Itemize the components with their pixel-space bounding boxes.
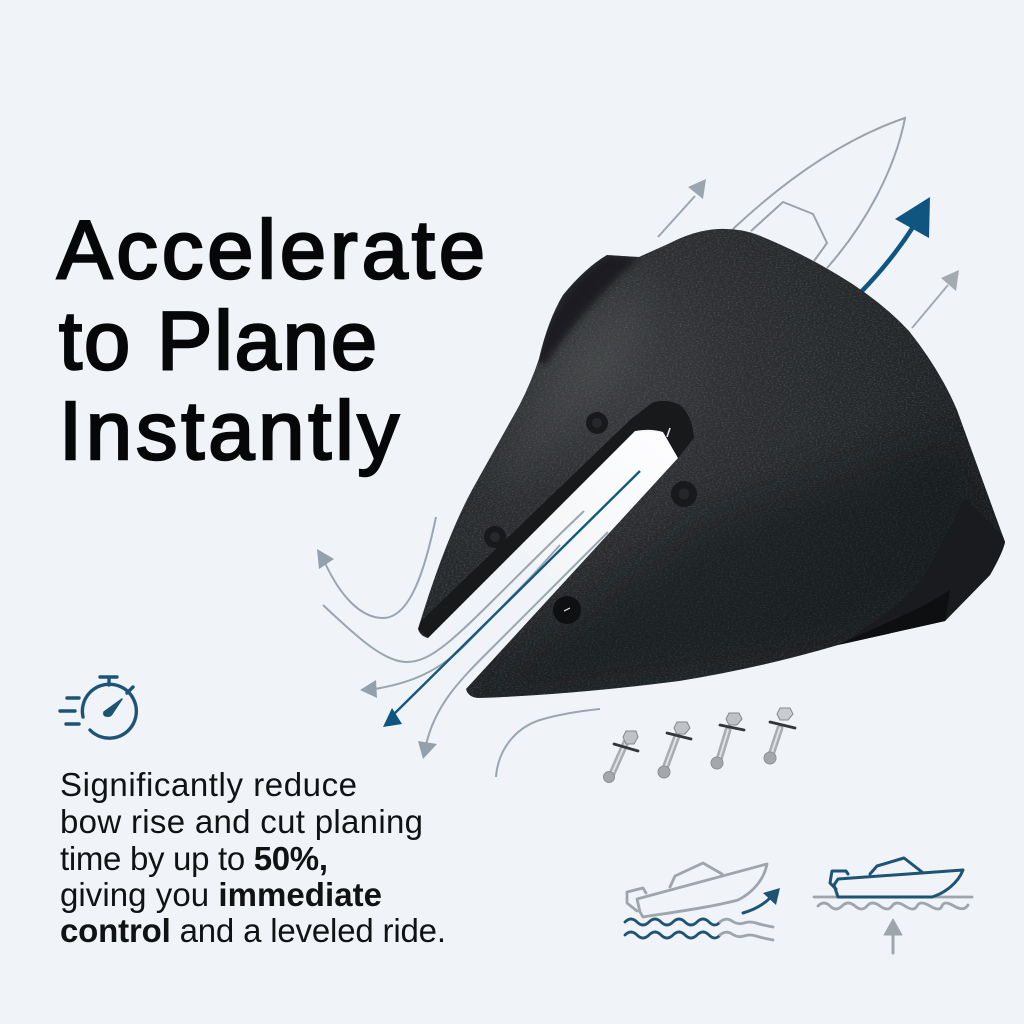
slot opening: [520, 431, 678, 588]
icon: boat with bow rise: [625, 863, 780, 940]
title: Accelerate: [57, 203, 485, 296]
lower shading: [470, 430, 1010, 700]
arrow: upper right lift: [912, 270, 959, 328]
mounting hole 4: [553, 596, 581, 624]
boat outline behind plate: [733, 118, 905, 268]
arrow: upper left lift: [658, 179, 706, 237]
body text: Significantly reduce: [60, 766, 357, 803]
left fin dark strip: [535, 255, 639, 365]
body text: giving you immediate: [60, 876, 382, 913]
bolt 2: [658, 722, 691, 778]
notch: [667, 428, 670, 437]
body text: bow rise and cut planing: [60, 803, 423, 840]
title: Instantly: [59, 384, 400, 477]
hardware: mounting bolts: [604, 708, 795, 782]
title: to Plane: [59, 294, 377, 387]
arrow: main navy lift: [861, 197, 930, 292]
mounting hole 2: [671, 481, 697, 507]
product: hydrofoil plate: [418, 229, 1010, 700]
highlight band: [490, 270, 645, 490]
bolt 4: [764, 708, 795, 764]
left arm bevel: [418, 401, 694, 638]
bolt 3: [711, 713, 744, 769]
icon: level boat: [814, 858, 972, 953]
water flow lines: [317, 471, 640, 777]
mounting hole 3: [484, 526, 506, 548]
bottom-right flap: [836, 498, 1005, 648]
body text: time by up to 50%,: [60, 840, 328, 877]
bolt 1: [604, 731, 638, 782]
body text: control and a leveled ride.: [60, 912, 446, 949]
icon: stopwatch: [60, 677, 136, 738]
mounting hole 1: [586, 412, 608, 434]
body text: [60, 766, 446, 949]
title: [57, 203, 485, 477]
